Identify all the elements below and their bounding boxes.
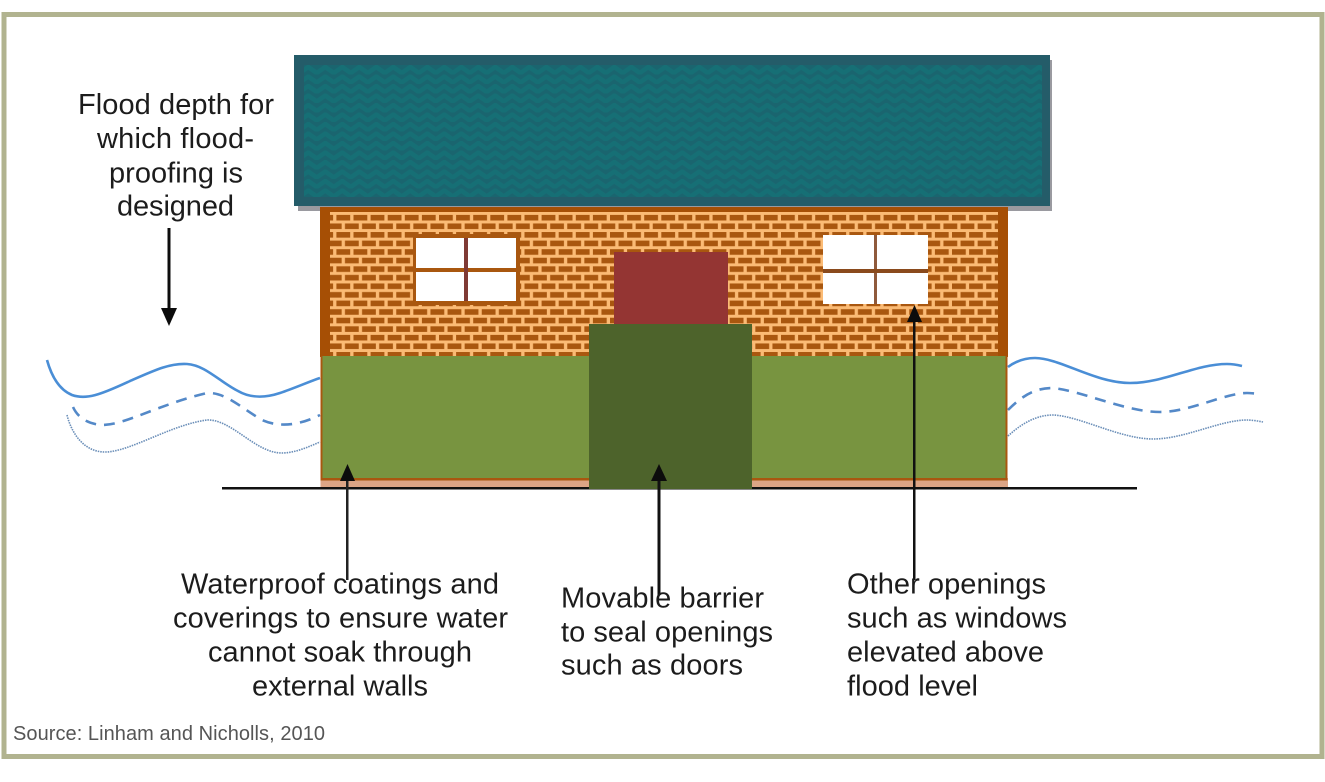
arrow: flood depth pointing down — [161, 228, 177, 326]
label: other openings: flood level — [847, 670, 978, 702]
label: movable barrier: such as doors — [561, 650, 743, 682]
label: waterproof coatings — [173, 568, 508, 702]
label: movable barrier: Movable barrier — [561, 582, 764, 614]
label: flood depth: which flood- — [96, 123, 254, 155]
right window — [823, 235, 928, 304]
label: flood depth: proofing is — [109, 158, 243, 190]
label: waterproof coatings: cannot soak through — [208, 636, 472, 668]
label: waterproof coatings: Waterproof coatings and — [181, 568, 499, 600]
brick walls — [320, 207, 1008, 357]
door — [614, 252, 728, 325]
label: flood depth: designed — [117, 190, 234, 222]
label: flood depth — [78, 89, 274, 222]
label: other openings: such as windows — [847, 602, 1067, 634]
label: other openings: elevated above — [847, 636, 1044, 668]
label: other openings — [847, 568, 1067, 702]
source note: Source: Linham and Nicholls, 2010 — [13, 723, 325, 745]
flood water right — [1008, 358, 1263, 439]
flood water left — [47, 360, 320, 453]
left window — [413, 234, 520, 305]
label: waterproof coatings: coverings to ensure water — [173, 602, 508, 634]
movable barrier — [589, 324, 752, 489]
arrow: to elevated window — [907, 305, 922, 580]
waterproof coating on walls — [320, 356, 1008, 480]
label: other openings: Other openings — [847, 568, 1046, 600]
label: movable barrier — [561, 582, 773, 682]
roof — [294, 55, 1052, 211]
label: waterproof coatings: external walls — [252, 670, 428, 702]
ground line — [222, 487, 1137, 490]
arrow: to waterproof coating — [340, 464, 355, 580]
house illustration — [222, 55, 1137, 490]
label: movable barrier: to seal openings — [561, 616, 773, 648]
wall base footing — [320, 478, 1008, 487]
label: flood depth: Flood depth for — [78, 89, 274, 121]
arrow: to movable barrier — [651, 464, 667, 595]
